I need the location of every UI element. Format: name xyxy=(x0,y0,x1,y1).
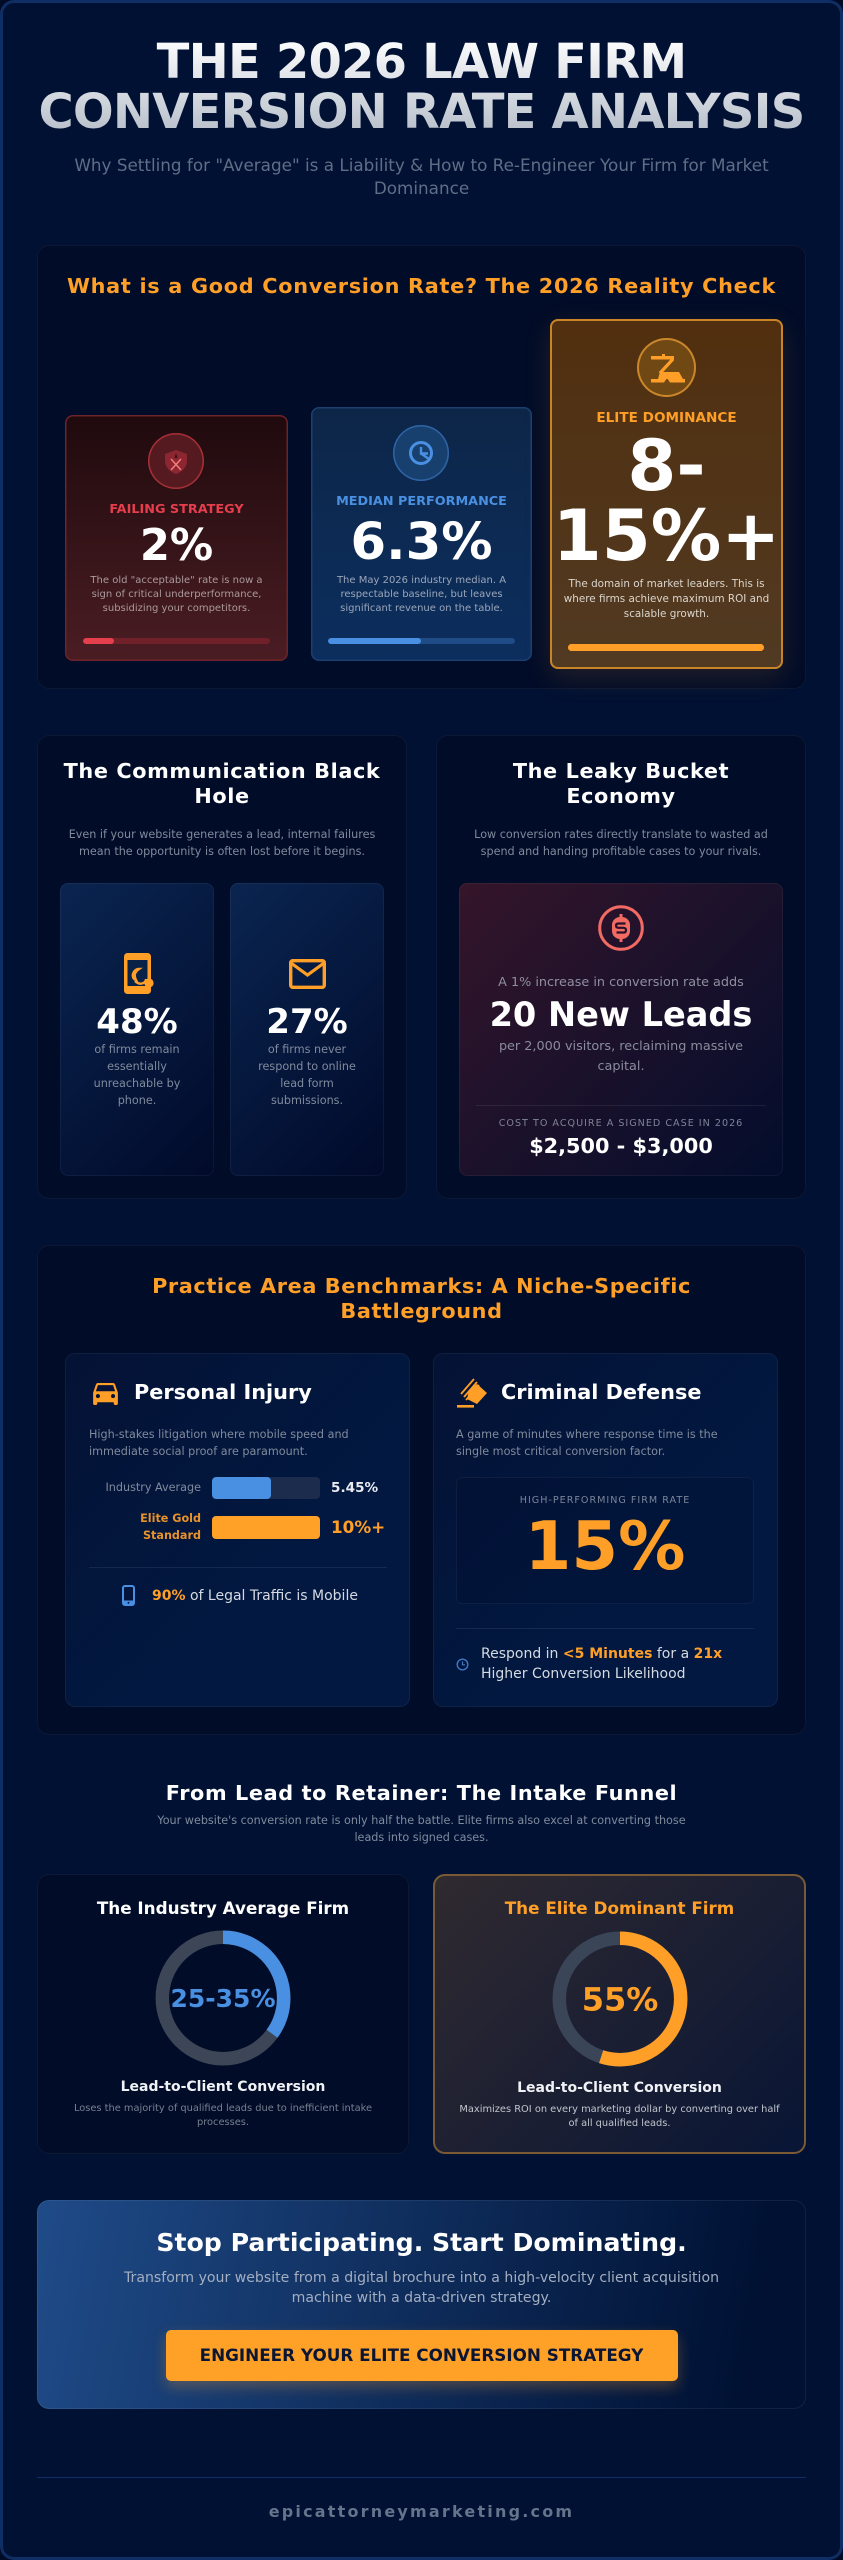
description xyxy=(124,2270,719,2306)
heading xyxy=(152,1274,691,1322)
label: Lead-to-Client Conversion xyxy=(517,2080,722,2096)
call to action panel xyxy=(37,2200,806,2409)
icon: gavel block xyxy=(457,1378,487,1408)
icon: mobile xyxy=(122,1585,135,1606)
title: CONVERSION RATE ANALYSIS xyxy=(38,84,804,140)
progress bar xyxy=(83,638,270,644)
progress bar xyxy=(568,644,764,651)
label: HIGH-PERFORMING FIRM RATE xyxy=(520,1495,690,1506)
label: MEDIAN PERFORMANCE xyxy=(336,494,507,509)
card: elite dominance xyxy=(550,319,783,669)
value: 48% xyxy=(96,1002,178,1042)
bar value: 5.45% xyxy=(331,1480,378,1496)
label: FAILING STRATEGY xyxy=(109,502,244,517)
icon: car xyxy=(93,1383,118,1405)
label: Lead-to-Client Conversion xyxy=(121,2079,325,2095)
value: cost: $2,500 - $3,000 xyxy=(529,1134,713,1158)
text: detail xyxy=(499,1039,743,1074)
description: spend and handing profitable cases to your rivals. xyxy=(481,844,761,858)
subtitle xyxy=(74,154,769,198)
card title: Personal Injury xyxy=(134,1380,312,1404)
heading: reality check: What is a Good Conversion Rate? The 2026 Reality Check xyxy=(67,274,776,298)
heading: The Leaky Bucket xyxy=(513,758,729,782)
bar xyxy=(212,1516,320,1539)
description: intake funnel: Your website's conversion rate is only half the battle. Elite firms also excel at converting those xyxy=(157,1814,686,1826)
description: of firms remain xyxy=(94,1042,180,1056)
stat box xyxy=(456,1477,754,1604)
heading: The Communication Black xyxy=(64,758,380,782)
bar label: Standard xyxy=(143,1528,201,1542)
heading xyxy=(512,758,729,808)
label: COST TO ACQUIRE A SIGNED CASE IN 2026 xyxy=(499,1118,743,1129)
description: Maximizes ROI on every marketing dollar by converting over half xyxy=(459,2104,780,2115)
description xyxy=(90,575,263,614)
divider xyxy=(476,1105,766,1106)
description: scalable growth. xyxy=(624,608,709,620)
description: Low conversion rates directly translate to wasted ad xyxy=(474,828,768,840)
panel: reality check xyxy=(37,245,806,689)
card: failing strategy xyxy=(65,415,288,661)
description: respectable baseline, but leaves xyxy=(340,589,503,600)
description: High-stakes litigation where mobile speed and xyxy=(89,1428,349,1440)
icon: shield xyxy=(148,433,204,489)
label: ELITE DOMINANCE xyxy=(596,410,737,426)
description: sign of critical underperformance, xyxy=(92,589,261,600)
description: lead form xyxy=(280,1076,334,1090)
text: detail: capital. xyxy=(597,1059,645,1074)
divider xyxy=(89,1567,387,1568)
donut chart: 55% xyxy=(552,1932,688,2066)
stat: mobile traffic: 90% of Legal Traffic is Mobile xyxy=(152,1588,358,1604)
value: 15% xyxy=(525,1507,685,1585)
title xyxy=(0,36,843,138)
title: THE 2026 LAW FIRM xyxy=(157,34,686,90)
donut chart: 55%: 55% xyxy=(581,1980,658,2018)
bar xyxy=(212,1477,320,1499)
description: significant revenue on the table. xyxy=(340,603,503,614)
button: ENGINEER YOUR ELITE CONVERSION STRATEGY xyxy=(200,2345,643,2365)
text: intro: A 1% increase in conversion rate adds xyxy=(498,975,744,990)
card: criminal defense xyxy=(433,1353,778,1707)
stat: response time: Higher Conversion Likelihood xyxy=(481,1666,686,1682)
subtitle: Dominance xyxy=(374,178,469,198)
text: detail: per 2,000 visitors, reclaiming massive xyxy=(499,1039,743,1054)
card: median performance xyxy=(311,407,532,661)
panel: communication black hole xyxy=(37,735,407,1199)
button xyxy=(166,2330,678,2381)
subtitle: Why Settling for "Average" is a Liability & How to Re-Engineer Your Firm for Market xyxy=(74,154,769,174)
stat card: email xyxy=(230,883,384,1176)
card title: The Industry Average Firm xyxy=(97,1898,349,1918)
description xyxy=(564,578,769,620)
description: where firms achieve maximum ROI and xyxy=(564,592,769,604)
value: 2% xyxy=(140,521,213,571)
heading: Hole xyxy=(194,784,250,808)
footer divider xyxy=(37,2477,806,2478)
description: respond to online xyxy=(258,1060,356,1072)
description: phone. xyxy=(118,1094,156,1106)
heading: intake funnel: From Lead to Retainer: The Intake Funnel xyxy=(166,1781,677,1805)
description: single most critical conversion factor. xyxy=(456,1444,665,1458)
bar label xyxy=(140,1512,201,1542)
heading: Economy xyxy=(566,784,676,808)
icon: gavel xyxy=(637,338,696,397)
heading: Practice Area Benchmarks: A Niche-Specific xyxy=(152,1274,691,1298)
value xyxy=(553,425,780,577)
description: submissions. xyxy=(271,1094,343,1106)
icon: clock xyxy=(456,1658,468,1670)
heading xyxy=(64,758,380,808)
bar value: 10%+ xyxy=(331,1517,385,1537)
footer URL: epicattorneymarketing.com xyxy=(269,2502,574,2521)
card title: The Elite Dominant Firm xyxy=(505,1898,734,1918)
description: Transform your website from a digital brochure into a high-velocity client acquisition xyxy=(124,2270,719,2286)
heading: Battleground xyxy=(340,1298,503,1322)
description xyxy=(74,2103,372,2128)
value: 8- xyxy=(627,425,706,507)
value: 15%+ xyxy=(553,495,780,577)
panel: practice area benchmarks xyxy=(37,1245,806,1735)
card: new leads xyxy=(459,883,783,1176)
description: Loses the majority of qualified leads due to inefficient intake xyxy=(74,2103,372,2114)
description xyxy=(258,1042,356,1106)
description: The domain of market leaders. This is xyxy=(568,578,765,590)
donut chart: 25-35% xyxy=(156,1930,290,2066)
description xyxy=(459,2104,780,2129)
card: industry average firm xyxy=(37,1874,409,2154)
stat: response time: Respond in <5 Minutes for a 21x xyxy=(481,1646,722,1662)
stat: response time xyxy=(481,1646,722,1682)
description: The old "acceptable" rate is now a xyxy=(90,575,263,586)
description: mean the opportunity is often lost before it begins. xyxy=(79,844,365,858)
icon: envelope xyxy=(289,959,326,989)
value: 6.3% xyxy=(351,512,492,572)
description xyxy=(336,575,506,614)
description xyxy=(456,1428,718,1458)
card: elite dominant firm xyxy=(433,1874,806,2154)
panel: leaky bucket economy xyxy=(436,735,806,1199)
bar row: industry average xyxy=(105,1477,378,1499)
divider xyxy=(456,1628,754,1629)
description: of all qualified leads. xyxy=(568,2118,671,2129)
description xyxy=(69,828,375,858)
description: processes. xyxy=(197,2117,249,2128)
heading: Stop Participating. Start Dominating. xyxy=(156,2228,687,2257)
bar label: Industry Average xyxy=(105,1481,201,1494)
progress bar xyxy=(328,638,515,644)
donut chart: 25-35%: 25-35% xyxy=(170,1984,276,2013)
card: personal injury xyxy=(65,1353,410,1707)
icon: clock xyxy=(393,425,449,481)
description: immediate social proof are paramount. xyxy=(89,1444,308,1458)
icon: dollar coin xyxy=(598,905,644,951)
card title: Criminal Defense xyxy=(501,1380,701,1404)
description: subsidizing your competitors. xyxy=(103,603,250,614)
bar label: Elite Gold xyxy=(140,1512,201,1524)
description: essentially xyxy=(107,1060,167,1072)
description: A game of minutes where response time is the xyxy=(456,1428,718,1440)
description: unreachable by xyxy=(94,1076,180,1090)
description: machine with a data-driven strategy. xyxy=(292,2290,551,2306)
description xyxy=(94,1042,180,1106)
description xyxy=(89,1428,349,1458)
icon: phone xyxy=(124,953,154,994)
description: Even if your website generates a lead, internal failures xyxy=(69,828,375,840)
description: intake funnel xyxy=(157,1814,686,1844)
stat card: phone xyxy=(60,883,214,1176)
bar row: elite gold standard xyxy=(140,1512,385,1542)
description: intake funnel: leads into signed cases. xyxy=(354,1830,489,1844)
description: The May 2026 industry median. A xyxy=(337,575,506,586)
description xyxy=(474,828,768,858)
value: 20 New Leads xyxy=(490,995,752,1034)
value: 27% xyxy=(266,1002,348,1042)
description: of firms never xyxy=(268,1042,346,1056)
